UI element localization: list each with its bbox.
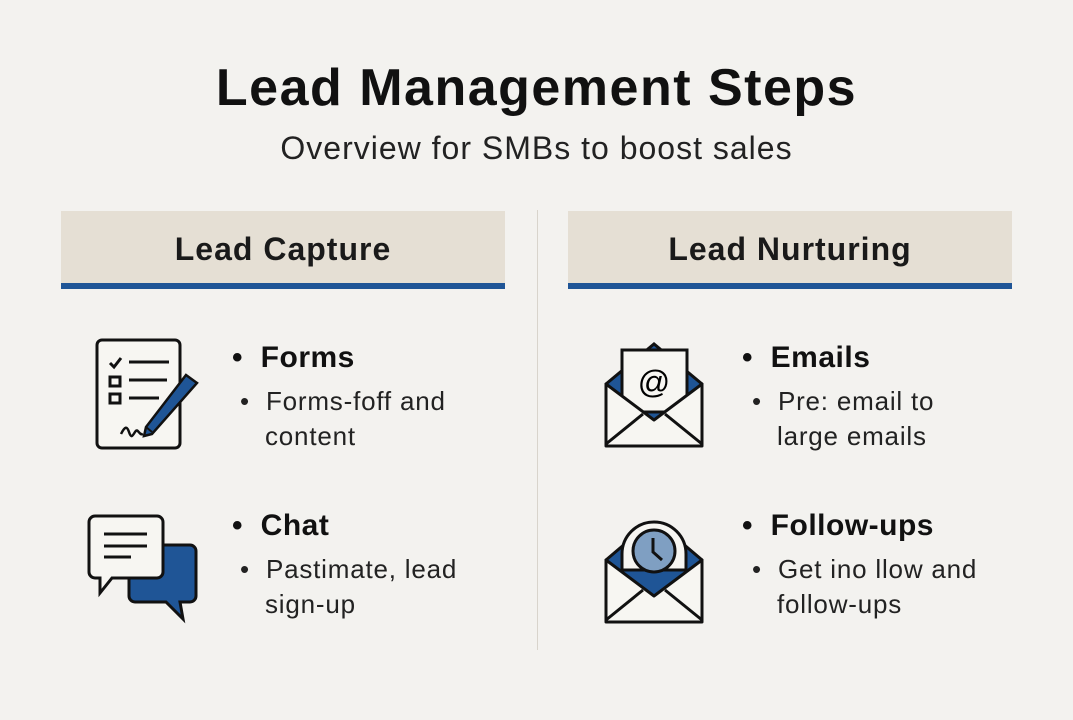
text: emails: large emails (777, 421, 927, 451)
text: chat (232, 509, 457, 619)
text: forms: • Forms (232, 341, 355, 374)
text: follow-ups: • Follow-ups (742, 509, 934, 542)
title: Lead Management Steps (216, 59, 857, 117)
icon: follow-up envelope with clock (604, 520, 704, 624)
icon: chat bubbles (88, 514, 198, 624)
heading: lead nurturing: Lead Nurturing (668, 231, 912, 267)
text: chat: sign-up (265, 589, 356, 619)
heading: lead capture (61, 211, 505, 289)
icon: email envelope: @ (638, 364, 670, 400)
text: emails (742, 341, 934, 451)
heading: lead nurturing (568, 211, 1012, 289)
text: follow-ups: follow-ups (777, 589, 902, 619)
text: forms: • Forms-foff and (240, 386, 446, 416)
text: follow-ups: • Get ino llow and (752, 554, 977, 584)
icon: email envelope (604, 342, 704, 448)
text: forms (232, 341, 446, 451)
icon: form with pen (96, 338, 199, 450)
text: chat: • Chat (232, 509, 329, 542)
heading: lead capture: Lead Capture (175, 231, 391, 267)
text: emails: • Pre: email to (752, 386, 934, 416)
subtitle: Overview for SMBs to boost sales (280, 130, 793, 166)
text: emails: • Emails (742, 341, 870, 374)
text: chat: • Pastimate, lead (240, 554, 457, 584)
text: forms: content (265, 421, 356, 451)
text: follow-ups (742, 509, 977, 619)
